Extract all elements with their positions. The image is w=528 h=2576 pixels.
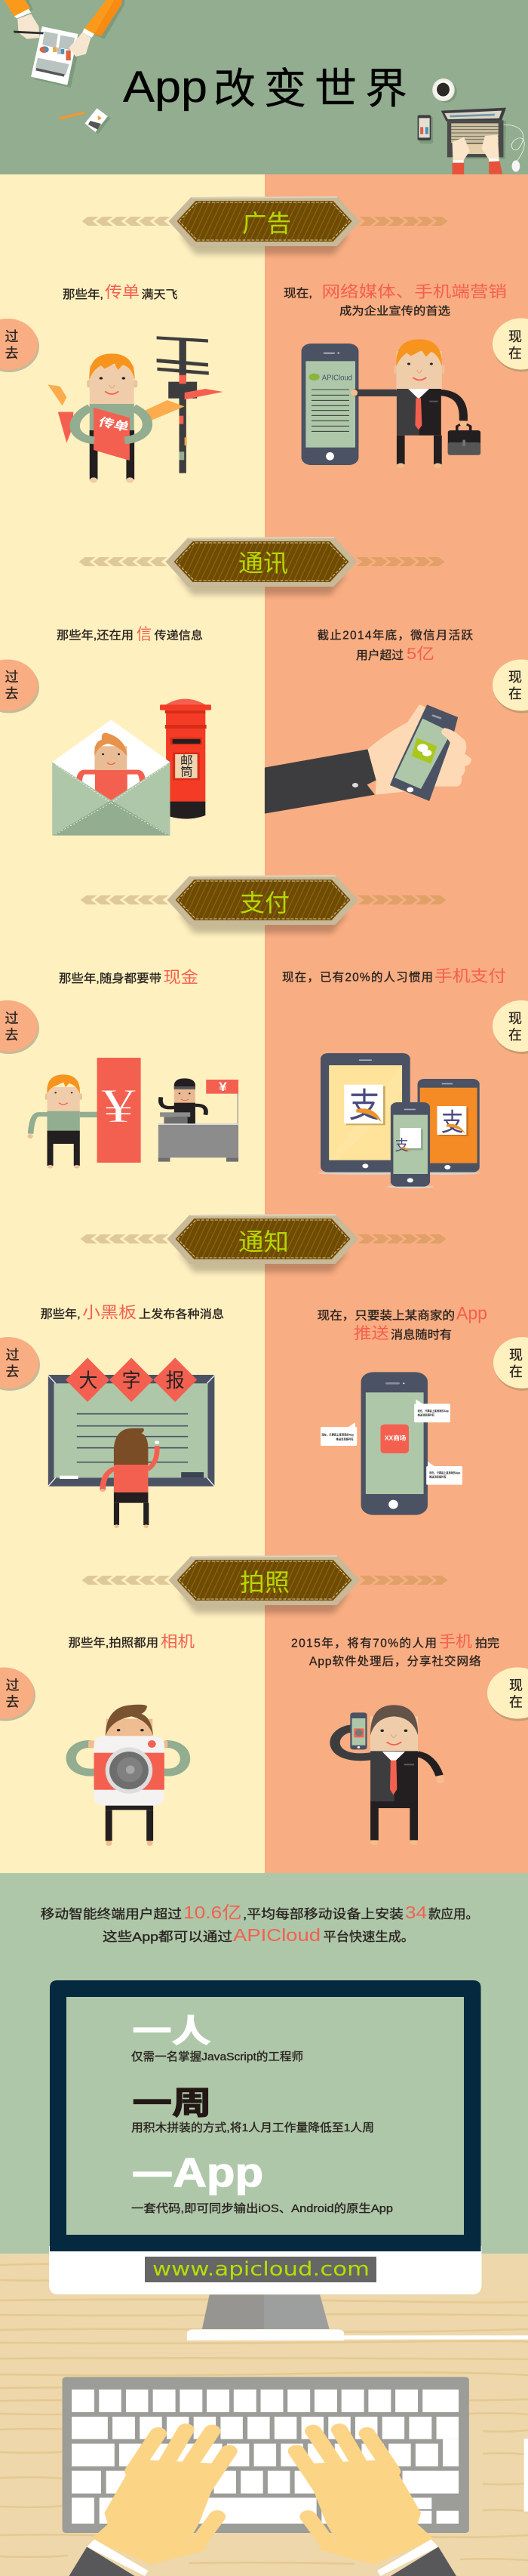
section: 广告 [0, 196, 528, 483]
illustration: man with cash and cashier: ¥ [219, 1080, 227, 1094]
tag: 过去: 去 [6, 1364, 20, 1379]
illustration: blackboard with girl: 字 [122, 1370, 141, 1391]
illustration: blackboard with girl: 报 [166, 1370, 185, 1391]
tag: 现在: 在 [508, 1028, 522, 1043]
tag: 现在: 现 [508, 1011, 522, 1026]
title: App [123, 63, 207, 112]
tag: 过去 [0, 319, 39, 372]
text: past communication: 那些年,还在用 [57, 628, 134, 642]
summary text: APICloud [233, 1925, 321, 1945]
header illustration: pencil and notebook [59, 108, 110, 134]
text: past payment: 现金 [163, 969, 198, 986]
text: present photography: 手机 [439, 1634, 472, 1650]
text: present notification: 现在，只要装上某商家的 [317, 1309, 455, 1323]
badge: 广告 [81, 196, 448, 254]
monitor stand [187, 2294, 528, 2340]
wood desk background [0, 2254, 528, 2576]
illustration: phone with push notifications: 现在，只要装上某商家的App [418, 1409, 449, 1413]
tag: 现在: 在 [508, 686, 522, 701]
badge: 通知: 通知 [238, 1228, 289, 1256]
illustration: phone with push notifications: 现在，只要装上某商家的App [429, 1471, 461, 1475]
caption: 一周: 用积木拼装的方式,将1人月工作量降低至1人周 [131, 2122, 374, 2134]
text: present notification: 消息随时有 [391, 1328, 452, 1342]
text: present notification [317, 1303, 487, 1342]
text: past photography: 那些年,拍照都用 [69, 1636, 158, 1650]
heading: 一周: 一周 [133, 2085, 211, 2121]
illustration: man with flyers and pole: 传单 [97, 415, 131, 434]
tag: 过去: 过 [5, 1011, 18, 1026]
illustration: phone with push notifications: 现在，只要装上某商家的App [321, 1432, 354, 1437]
illustration: devices with Alipay icons [318, 1053, 480, 1188]
badge: 通讯: 通讯 [238, 550, 288, 577]
tag: 现在: 现 [508, 670, 522, 685]
caption: 一人: 仅需一名掌握JavaScript的工程师 [131, 2051, 303, 2063]
illustration: devices with Alipay icons: 支 [441, 1108, 463, 1137]
text: present payment [282, 968, 506, 985]
illustration: envelope with person and mailbox [52, 699, 211, 836]
tag: 过去: 去 [5, 1028, 18, 1043]
tag: 现在 [493, 319, 528, 371]
illustration: blackboard with girl [48, 1357, 214, 1528]
text: present photography: 拍完 [475, 1637, 499, 1650]
text: past advertising: 传单 [105, 284, 140, 301]
website url [145, 2257, 376, 2282]
badge: 通讯 [78, 537, 445, 595]
text: past notification: 小黑板 [82, 1305, 137, 1321]
tag: 现在 [493, 1000, 528, 1054]
illustration: phone with APICloud and businessman [302, 339, 480, 468]
illustration: envelope with person and mailbox: 邮 [180, 754, 193, 767]
tag: 现在: 在 [509, 1694, 523, 1709]
tag: 过去 [0, 660, 39, 713]
illustration: phone with APICloud and businessman: APICloud [322, 373, 352, 382]
tag: 现在: 现 [508, 329, 522, 344]
text: past notification: 那些年, [41, 1308, 81, 1321]
text: past payment: 那些年,随身都要带 [59, 972, 161, 985]
tag: 过去 [0, 1667, 35, 1721]
tag: 现在: 现 [509, 1678, 523, 1693]
text: past advertising [63, 284, 178, 301]
illustration: man with flyers and pole [48, 336, 223, 483]
caption: 一App: 一套代码,即可同步输出iOS、Android的原生App [131, 2202, 393, 2215]
text: present advertising [284, 284, 507, 318]
heading: 一App: 一 [132, 2158, 173, 2193]
tag: 现在: 现 [509, 1348, 523, 1363]
heading: 一人: 一人 [133, 2014, 211, 2049]
illustration: devices with Alipay icons: 支 [395, 1137, 409, 1154]
illustration: phone with push notifications: 推送消息随时有 [336, 1437, 354, 1441]
badge: 通知 [80, 1214, 447, 1272]
badge: 拍照: 拍照 [240, 1569, 290, 1596]
text: present communication: 截止2014年底，微信月活跃 [317, 628, 473, 642]
monitor frame [50, 1980, 481, 2251]
tag: 现在 [487, 1667, 528, 1721]
text: present communication [317, 628, 473, 663]
illustration: devices with Alipay icons: 支 [349, 1087, 380, 1124]
summary text: 34 [405, 1903, 427, 1922]
text: present advertising: 网络媒体、手机端营销 [321, 284, 507, 300]
heading: 一App: App [173, 2150, 263, 2195]
illustration: hand holding phone with WeChat [265, 704, 471, 814]
text: past communication: 传递信息 [154, 630, 203, 642]
illustration: phone with push notifications: 推送消息随时有 [418, 1413, 434, 1417]
tag: 过去: 去 [5, 686, 18, 701]
text: present advertising: 现在, [284, 287, 312, 300]
hand: left [69, 2430, 229, 2576]
illustration: envelope with person and mailbox: 筒 [180, 766, 193, 778]
title: 改变世界 [213, 65, 407, 112]
left column background: past [0, 174, 265, 1873]
badge: 支付 [80, 875, 447, 933]
tag: 过去 [0, 1000, 39, 1054]
text: past notification: 上发布各种消息 [139, 1308, 224, 1321]
text: present notification: 推送 [354, 1325, 389, 1342]
tag: 过去 [0, 1337, 40, 1391]
header illustration: desk with paper and hands [4, 0, 124, 88]
text: present payment: 手机支付 [434, 968, 506, 985]
summary text: 平台快速生成。 [323, 1930, 414, 1944]
illustration: blackboard with girl: 大 [78, 1370, 97, 1391]
tag: 过去: 去 [5, 346, 18, 361]
summary text: 10.6亿 [183, 1903, 241, 1922]
tag: 过去: 过 [5, 670, 18, 685]
tag: 过去: 过 [6, 1678, 20, 1693]
tag: 过去: 过 [6, 1348, 20, 1363]
header band [0, 0, 528, 175]
text: past photography: 相机 [161, 1634, 195, 1650]
text: past photography [69, 1634, 195, 1650]
hand: right [296, 2430, 456, 2576]
text: present payment: 现在，已有20%的人习惯用 [282, 971, 433, 984]
text: past advertising: 满天飞 [142, 288, 178, 301]
text: past payment [59, 969, 198, 986]
summary text: 款应用。 [428, 1907, 478, 1921]
text: past notification [41, 1305, 224, 1321]
right column background: present [265, 174, 528, 1873]
text: present communication: 5亿 [407, 646, 434, 663]
monitor [49, 1980, 528, 2340]
title [123, 63, 407, 112]
summary text: 移动智能终端用户超过 [41, 1907, 182, 1921]
keyboard [63, 2377, 528, 2533]
text: present photography: App软件处理后，分享社交网络 [309, 1655, 481, 1669]
illustration: phone with push notifications: XX商场 [385, 1434, 407, 1442]
tag: 过去: 去 [6, 1694, 20, 1709]
header illustration: phone, laptop, hands and mouse [418, 108, 524, 174]
tag: 现在: 在 [508, 346, 522, 361]
illustration: phone with push notifications: 推送消息随时有 [429, 1474, 447, 1479]
tag: 现在 [493, 1337, 528, 1391]
bottom green panel [0, 1873, 528, 2254]
monitor screen [66, 1997, 464, 2235]
section: 通知 [0, 1214, 528, 1528]
badge: 拍照 [81, 1555, 448, 1613]
text: past communication [57, 626, 203, 643]
text: present communication: 用户超过 [356, 649, 404, 662]
section: 拍照 [0, 1555, 528, 1846]
heading: 一App [132, 2150, 263, 2195]
text: present notification: App [456, 1303, 487, 1324]
tag: 现在 [493, 660, 528, 713]
text: past advertising: 那些年, [63, 288, 103, 301]
illustration: man with cash and cashier [28, 1058, 238, 1169]
text: present photography [291, 1634, 499, 1669]
text: present photography: 2015年，将有70%的人用 [291, 1637, 437, 1650]
section: 通讯 [0, 537, 528, 836]
summary text: ,平均每部移动设备上安装 [243, 1907, 404, 1921]
header illustration: coffee cup [432, 79, 457, 103]
badge: 支付: 支付 [240, 889, 290, 917]
illustration: man with cash and cashier: ¥ [101, 1079, 137, 1133]
monitor chin [49, 2246, 481, 2294]
illustration: phone with push notifications [321, 1372, 462, 1515]
summary text [41, 1903, 478, 1945]
text: past communication: 信 [137, 626, 152, 643]
badge: 广告: 广告 [242, 210, 291, 237]
illustration: person holding camera [71, 1705, 185, 1846]
tag: 现在: 在 [509, 1364, 523, 1379]
text: present advertising: 成为企业宣传的首选 [339, 304, 450, 318]
tag: 过去: 过 [5, 329, 18, 344]
website url: www.apicloud.com [152, 2258, 370, 2281]
summary text: 这些App都可以通过 [103, 1930, 232, 1944]
illustration: man taking phone call [335, 1705, 444, 1845]
section: 支付 [0, 875, 528, 1188]
